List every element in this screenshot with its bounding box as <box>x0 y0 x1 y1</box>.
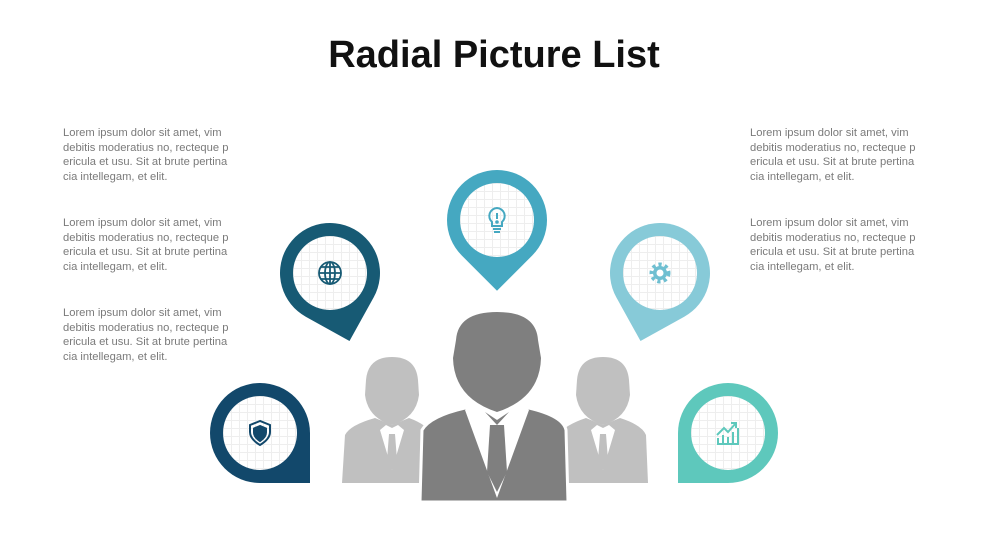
text block: left 1 <box>63 127 228 183</box>
text block: left 3: cia intellegam, et elit. <box>63 351 167 363</box>
icon: growth chart <box>716 422 739 445</box>
icon: gear <box>650 262 670 284</box>
text block: left 3: debitis moderatius no, recteque p <box>63 322 228 334</box>
icon: globe <box>318 261 342 285</box>
text block: left 3 <box>63 307 228 363</box>
text block: left 1: debitis moderatius no, recteque p <box>63 142 228 154</box>
person: left <box>342 357 432 483</box>
text block: right 2: ericula et usu. Sit at brute pertina <box>750 246 914 258</box>
person: right <box>558 357 648 483</box>
text block: right 1: ericula et usu. Sit at brute pertina <box>750 156 914 168</box>
text block: right 1: debitis moderatius no, recteque p <box>750 142 915 154</box>
text block: left 2: debitis moderatius no, recteque p <box>63 232 228 244</box>
pin: lightbulb <box>447 170 547 291</box>
text block: left 1: ericula et usu. Sit at brute pertina <box>63 156 227 168</box>
text block: right 2: debitis moderatius no, recteque p <box>750 232 915 244</box>
text block: left 2: ericula et usu. Sit at brute pertina <box>63 246 227 258</box>
text block: right 2: cia intellegam, et elit. <box>750 261 854 273</box>
text block: left 2 <box>63 217 228 273</box>
pin: chart <box>678 383 778 483</box>
text block: left 1: cia intellegam, et elit. <box>63 171 167 183</box>
text block: left 3: Lorem ipsum dolor sit amet, vim <box>63 307 222 319</box>
title: Radial Picture List <box>328 34 660 76</box>
person: center <box>420 312 568 502</box>
pin: globe <box>280 223 380 341</box>
text block: right 2: Lorem ipsum dolor sit amet, vim <box>750 217 909 229</box>
text block: right 1 <box>750 127 915 183</box>
text block: left 2: cia intellegam, et elit. <box>63 261 167 273</box>
text block: left 1: Lorem ipsum dolor sit amet, vim <box>63 127 222 139</box>
icon: lightbulb <box>488 207 506 233</box>
text block: left 3: ericula et usu. Sit at brute pertina <box>63 336 227 348</box>
text block: left 2: Lorem ipsum dolor sit amet, vim <box>63 217 222 229</box>
pin: gear <box>610 223 710 341</box>
text block: right 1: cia intellegam, et elit. <box>750 171 854 183</box>
icon: shield <box>249 420 271 446</box>
text block: right 1: Lorem ipsum dolor sit amet, vim <box>750 127 909 139</box>
pin: shield <box>210 383 310 483</box>
text block: right 2 <box>750 217 915 273</box>
